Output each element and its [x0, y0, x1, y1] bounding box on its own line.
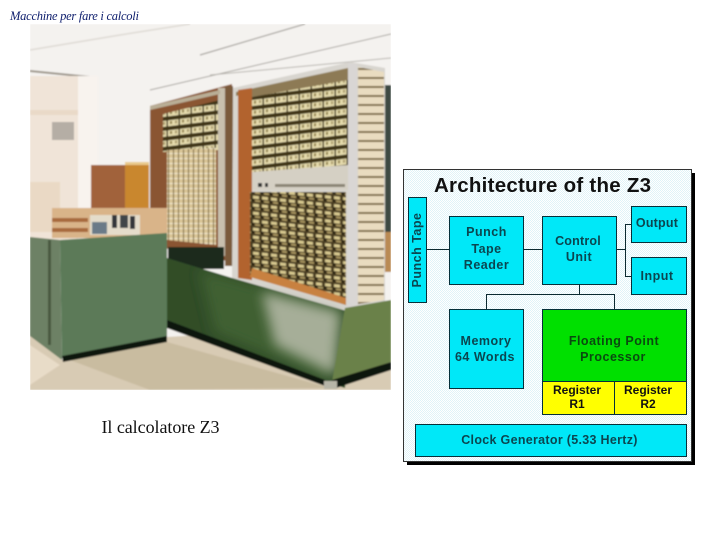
floor [30, 335, 391, 390]
box: memory: Memory [461, 334, 511, 348]
box: register R2 [614, 382, 686, 414]
box: floating point processor: Processor [580, 350, 646, 364]
box: punch tape reader: Punch [466, 225, 507, 239]
box: control unit: Unit [566, 250, 592, 264]
box: punch tape reader: Reader [464, 258, 509, 272]
connector lines [427, 224, 631, 309]
diagram title: Architecture of the Z3 [434, 174, 651, 197]
box: register R2: Register [624, 383, 672, 397]
box: floating point processor: Floating Point [569, 334, 659, 348]
equipment on table [52, 208, 167, 238]
front rack [232, 62, 385, 312]
box: control unit: Control [555, 234, 601, 248]
box: floating point processor [542, 310, 686, 382]
box: memory: 64 Words [455, 350, 515, 364]
panel shadow [407, 173, 695, 465]
left wall [30, 76, 78, 246]
box: register R1: Register [553, 383, 601, 397]
box: input [632, 258, 686, 294]
caption: Il calcolatore Z3 [102, 417, 220, 437]
box: punch tape [408, 198, 426, 302]
box: punch tape reader: Tape [471, 242, 502, 256]
box: control unit [542, 216, 616, 284]
rear rack [150, 84, 232, 262]
box: output: Output [636, 216, 679, 230]
box: register R2: R2 [640, 397, 656, 411]
box: input: Input [640, 269, 674, 283]
front green box [30, 237, 62, 360]
box: register R1 [542, 382, 614, 414]
panel background [404, 170, 692, 462]
title: Macchine per fare i calcoli: Macchine per fare i calcoli [9, 9, 140, 23]
box: clock generator: Clock Generator (5.33 Hertz) [461, 433, 638, 447]
brown boxes [91, 165, 125, 215]
box: punch tape: Punch Tape [410, 213, 424, 287]
photo: Z3 calculator [30, 24, 391, 390]
right face [332, 300, 391, 382]
dark green rear base [167, 258, 350, 388]
panel: architecture diagram [404, 170, 695, 465]
box: clock generator [416, 424, 686, 456]
box: register R1: R1 [569, 397, 585, 411]
box: memory [450, 310, 524, 388]
box: punch tape reader [450, 216, 524, 284]
box: output [632, 206, 686, 242]
